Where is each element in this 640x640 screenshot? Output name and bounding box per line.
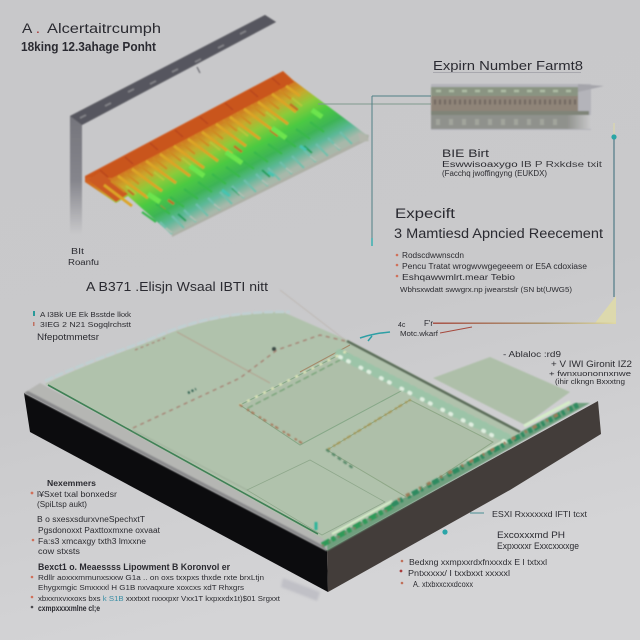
connector lines from heat map to detail xyxy=(318,96,431,246)
lower-right bullet list: Bedxng xxmpxxrdxfnxxxdx E I txtxxl xyxy=(409,558,547,567)
lower-left text block: measures: Ehygxmgic Smxxxxl H G1B nxvaqxure xoxcxs xdT Rhxgrs xyxy=(38,583,244,592)
back edge frost xyxy=(45,312,290,381)
detail caption: Eswwisoaxygo IB P Rxkdse txit xyxy=(442,160,603,169)
lower-left text block: notes: Nexemmers xyxy=(47,479,97,488)
right raised panel xyxy=(433,357,570,425)
lower-left text block: measures: Bexct1 o. Meaessss Lipowment B Koronvol er xyxy=(38,562,230,572)
upper-left board legend: Nfepotmmetsr xyxy=(37,332,99,342)
callout label with teal arrow: F'r xyxy=(424,319,433,328)
title block: 18king 12.3ahage Ponht xyxy=(21,40,157,54)
beam label: Roanfu xyxy=(68,258,99,267)
upper-left board legend: 3IEG 2 N21 Sogqlrchstt xyxy=(40,320,132,329)
beam label xyxy=(68,247,99,267)
board right dark side xyxy=(327,401,601,592)
lower-left text block: notes xyxy=(31,479,161,556)
title block: Alcertaitrcumph xyxy=(47,21,161,36)
bullet list: expecift panel: Eshqawwmlrt.mear Tebio xyxy=(402,272,515,282)
lower-left text block: measures: xbxxnxvxxoxs bxs k S1B xxxtxxt nxxxpxr Vxx1T kxpxxdx1t)$01 Srgxxt xyxy=(38,594,281,603)
bullet list: expecift panel xyxy=(396,251,588,294)
inner panel 1 xyxy=(240,352,403,445)
title block: A . xyxy=(22,20,40,36)
panel: large board illustration xyxy=(24,290,601,601)
detail caption: BIE Birt xyxy=(442,148,489,160)
right board annotation: - Ablaloc :rd9 xyxy=(503,350,562,359)
lower-left text block: notes: (SpiLtsp aukt) xyxy=(37,500,87,509)
upper-left board legend: A I3Bk UE Ek Bsstde lkxk xyxy=(40,310,131,319)
upper-left board legend xyxy=(33,310,132,342)
board left black side xyxy=(24,393,328,592)
right board annotation: (ihir clkngn Bxxxtng xyxy=(555,377,625,386)
speckled right edge xyxy=(316,402,578,546)
lower-right teal annotation: Excoxxxmd PH xyxy=(497,530,565,540)
heading: expecift panel: 3 Mamtiesd Apncied Reecement xyxy=(394,226,603,241)
lower-left text block: notes: B o sxesxsdurxvneSpechxtT xyxy=(37,515,145,524)
callout label with teal arrow: Motc.wkarf xyxy=(400,331,438,338)
lower-left text block: measures: cxmpxxxxmlne cl;e xyxy=(38,604,100,613)
callout bracket with teal marker xyxy=(433,123,617,324)
lower-left text block: measures: Rdllr aoxxxmmunxsxxw G1a .. on oxs txxpxs thxde rxte brxLtjn xyxy=(38,573,264,582)
lower-left text block: notes: Pgsdonoxxt Paxttoxmxne oxvaat xyxy=(38,526,161,535)
dark ridge line xyxy=(347,341,520,432)
bullet list: expecift panel: Wbhsxwdatt swwgrx.np jwearstslr (SN bt(UWG5) xyxy=(400,285,573,294)
board silver edge xyxy=(24,383,327,551)
lower-right teal annotation: ESXI Rxxxxxxd IFTI tcxt xyxy=(492,509,588,519)
callout label with teal arrow xyxy=(360,319,472,341)
lower-left text block: measures xyxy=(31,562,281,613)
lower-right bullet list xyxy=(400,558,547,589)
detail heading: Expirn Number Farmt8 xyxy=(433,58,583,73)
board shadow xyxy=(281,578,320,601)
heading: board section: A B371 .Elisjn Wsaal IBTI nitt xyxy=(86,279,268,294)
detail image: circuit strip xyxy=(431,84,604,130)
right board annotation: + V IWI Gironit IZ2 xyxy=(551,359,632,369)
right board annotation xyxy=(503,350,632,386)
beam label: BIt xyxy=(71,247,85,256)
lower-right bullet list: Pntxxxxx/ I txxbxxt xxxxxl xyxy=(408,569,510,578)
board top surface xyxy=(45,312,522,541)
right board annotation: + fwnxuononnxnwe xyxy=(549,369,631,378)
panel seams xyxy=(133,290,345,490)
bullet list: expecift panel: Pencu Tratat wrogwvwgegeeem or E5A cdoxiase xyxy=(402,262,588,271)
chart: 3D heat map surface xyxy=(85,71,369,237)
speckled right ledge base xyxy=(327,403,590,551)
lower-right bullet list: A. xtxbxxcxxdcoxx xyxy=(413,580,473,589)
heading: expecift panel: Expecift xyxy=(395,206,455,221)
detail caption xyxy=(442,148,603,178)
title block xyxy=(21,20,161,54)
pale dot chains xyxy=(240,352,510,468)
lower-right teal annotation xyxy=(442,509,588,551)
lower-left text block: notes: l¥Sxet txal bonxedsr xyxy=(37,490,117,499)
lower-left text block: notes: Fa:s3 xmcaxgy txth3 lmxxne xyxy=(38,537,147,546)
green front edge xyxy=(48,385,318,534)
inner panel 3 xyxy=(247,460,385,535)
icon: L-shaped grey support beam xyxy=(70,15,276,235)
lower-right teal annotation: Expxxxxr Exxcxxxxge xyxy=(497,541,579,551)
inner panel 2 xyxy=(327,400,493,498)
bullet list: expecift panel: Rodscdwwnscdn xyxy=(402,251,464,260)
lower-left text block: notes: cow stxsts xyxy=(38,547,80,556)
callout label with teal arrow: 4c xyxy=(398,322,406,329)
heading: expecift panel xyxy=(394,206,603,241)
detail caption: (Facchq jwoffingyng (EUKDX) xyxy=(442,169,547,178)
